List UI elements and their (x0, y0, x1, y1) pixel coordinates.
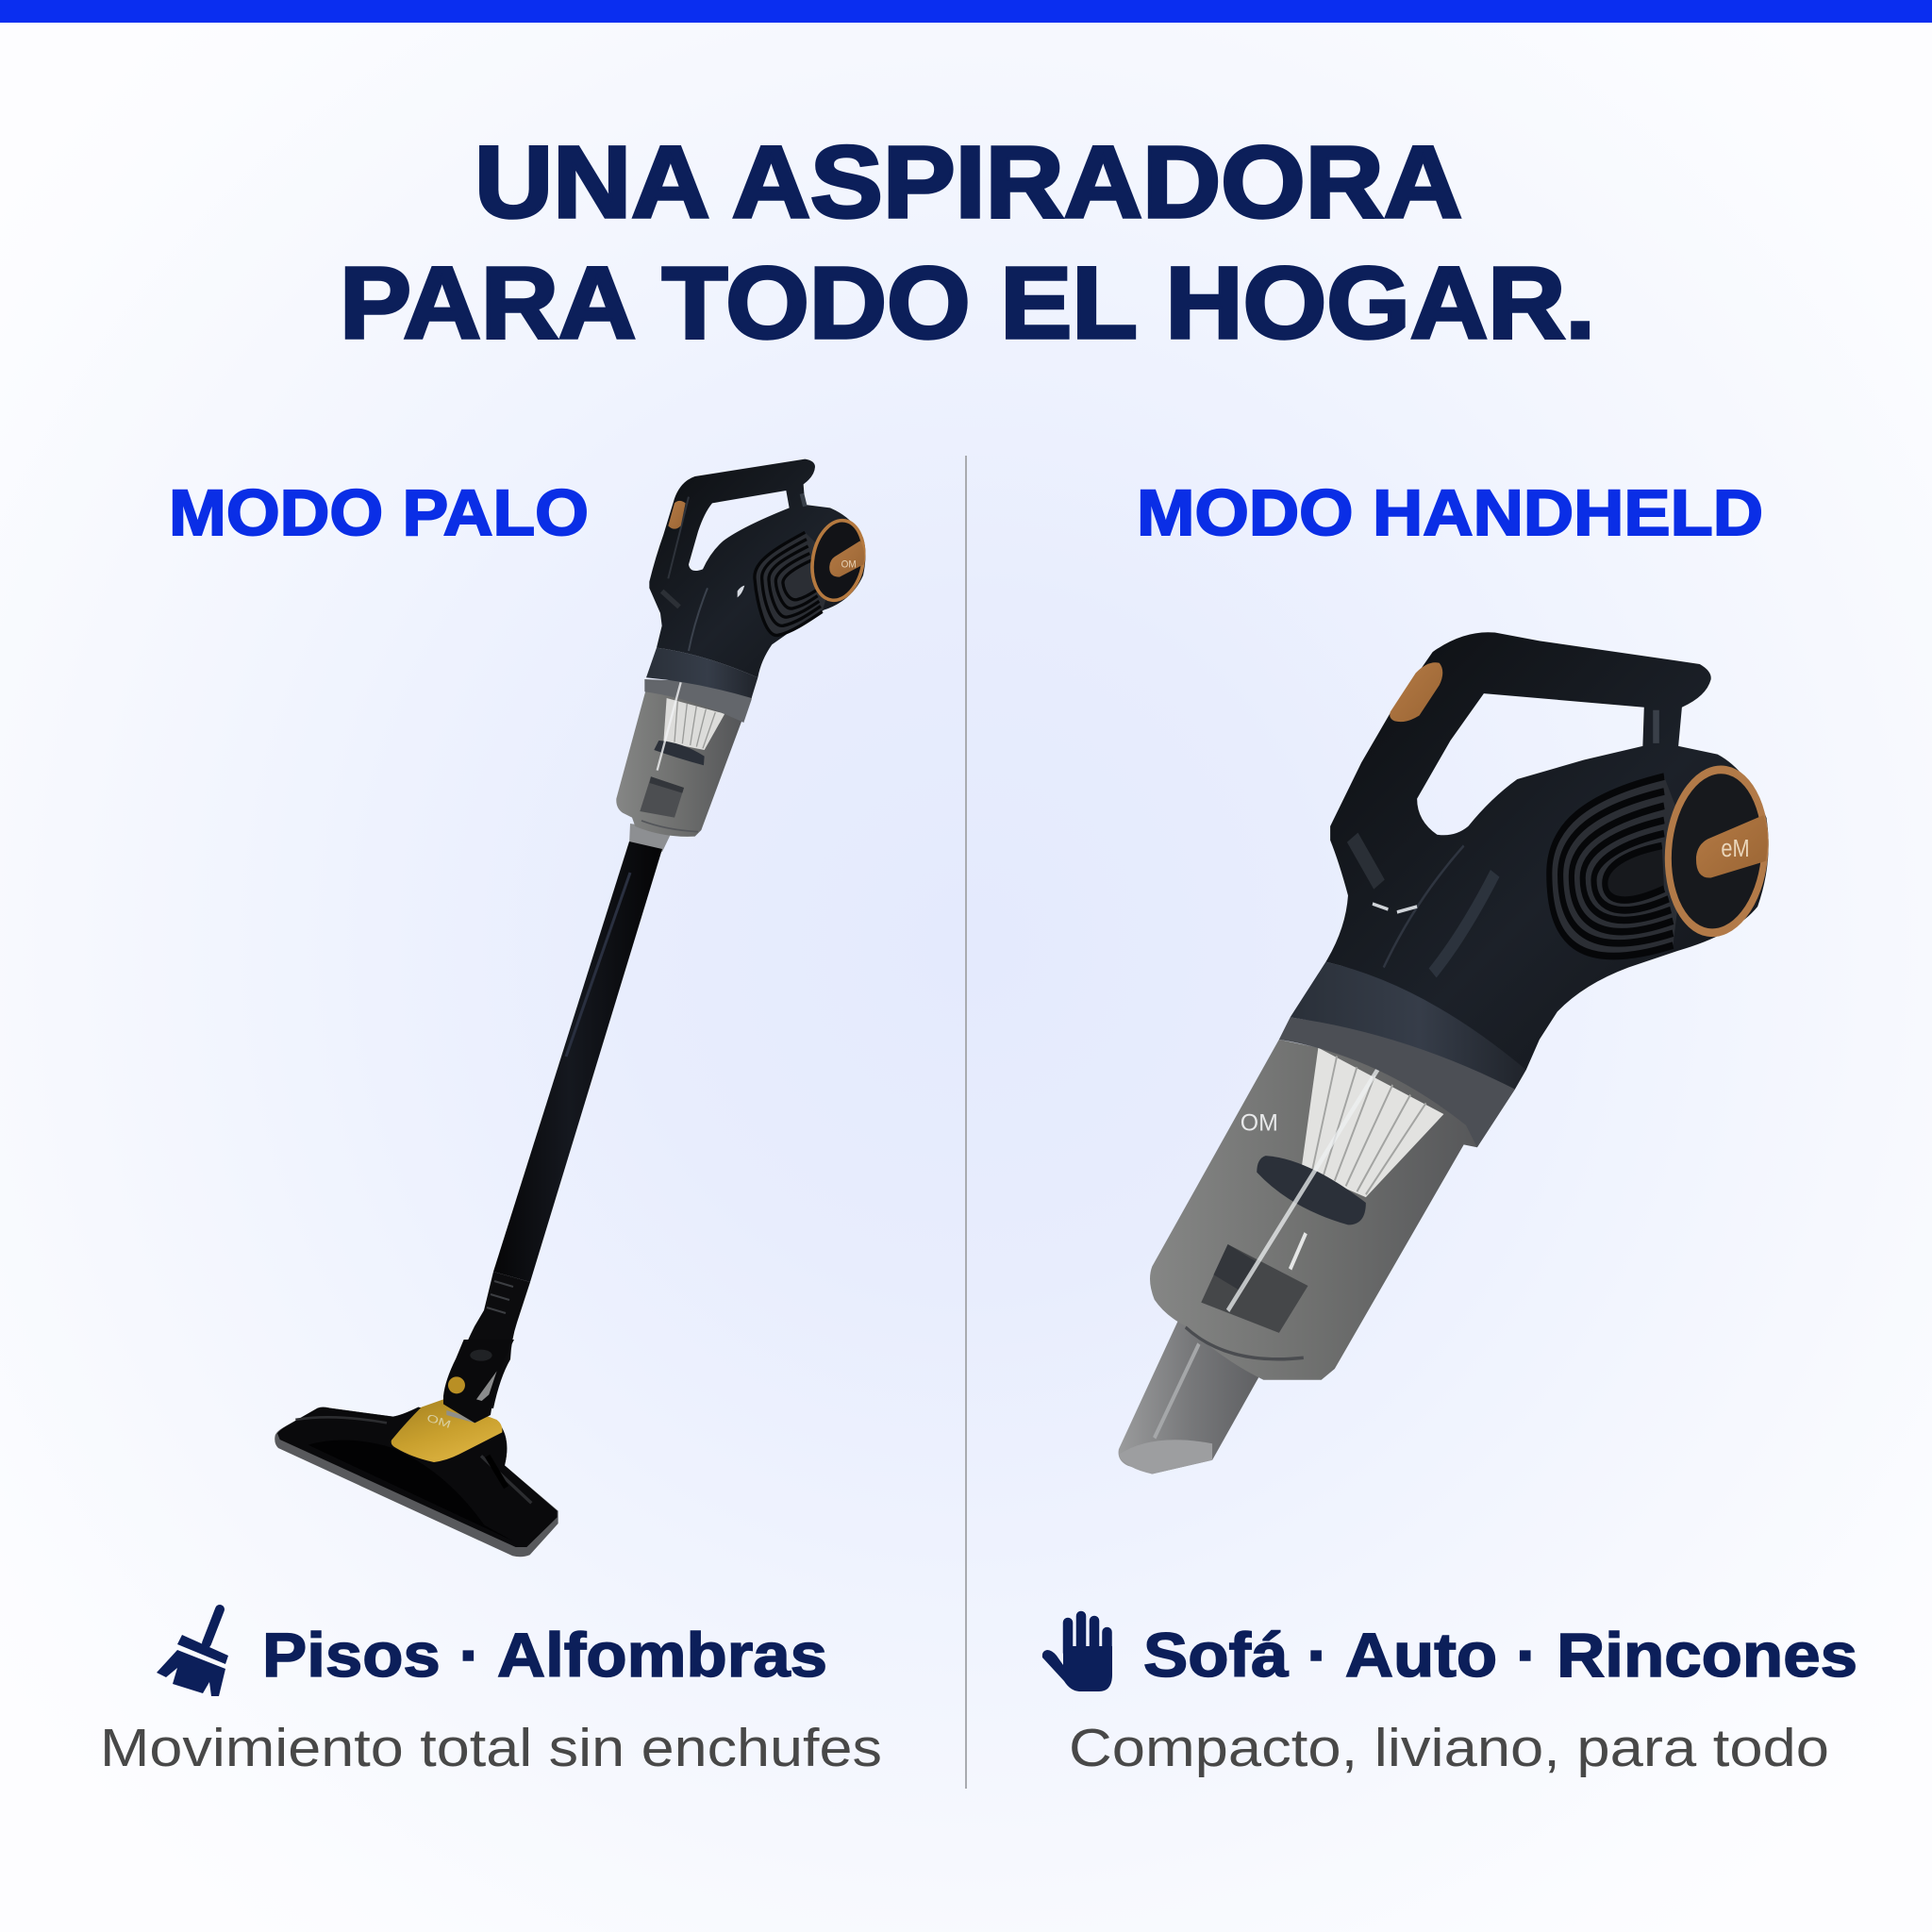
icon: open hand (1042, 1616, 1112, 1691)
heading: modo handheld: MODO HANDHELD (1137, 476, 1763, 549)
panel: modo handheld (1042, 476, 1857, 1778)
title: PARA TODO EL HOGAR. (340, 245, 1595, 359)
collar bands (1279, 962, 1526, 1147)
floor nozzle: OM (425, 1412, 452, 1431)
illustration: stick vacuum (275, 459, 870, 1557)
icon: broom (157, 1609, 228, 1696)
label: pisos y alfombras: Pisos · Alfombras (262, 1620, 827, 1690)
heading: modo palo: MODO PALO (169, 476, 589, 549)
illustration: handheld vacuum (1119, 632, 1774, 1474)
canister and motor head: OM (841, 559, 857, 571)
description: modo handheld: Compacto, liviano, para todo (1069, 1718, 1829, 1778)
copper button (1390, 662, 1442, 722)
copper badge: eM (1721, 835, 1750, 862)
description: modo palo: Movimiento total sin enchufes (100, 1718, 882, 1778)
copper ring (1660, 762, 1774, 941)
body highlights (1353, 710, 1657, 973)
vacuum tube (456, 824, 673, 1408)
label: sofa, auto, rincones: Sofá · Auto · Rincones (1143, 1620, 1857, 1690)
top accent bar (0, 0, 1932, 23)
transparent dust canister (1150, 990, 1515, 1380)
copper badge (1696, 815, 1768, 878)
body and handle (1325, 632, 1769, 1070)
floor nozzle (275, 1340, 558, 1557)
canister and motor head (616, 459, 870, 837)
panel: modo palo (100, 459, 882, 1778)
transparent dust canister: OM (1241, 1110, 1278, 1136)
title: UNA ASPIRADORA (475, 125, 1462, 239)
nozzle (1119, 1319, 1263, 1474)
vent grille (1549, 776, 1687, 957)
title (340, 125, 1595, 359)
